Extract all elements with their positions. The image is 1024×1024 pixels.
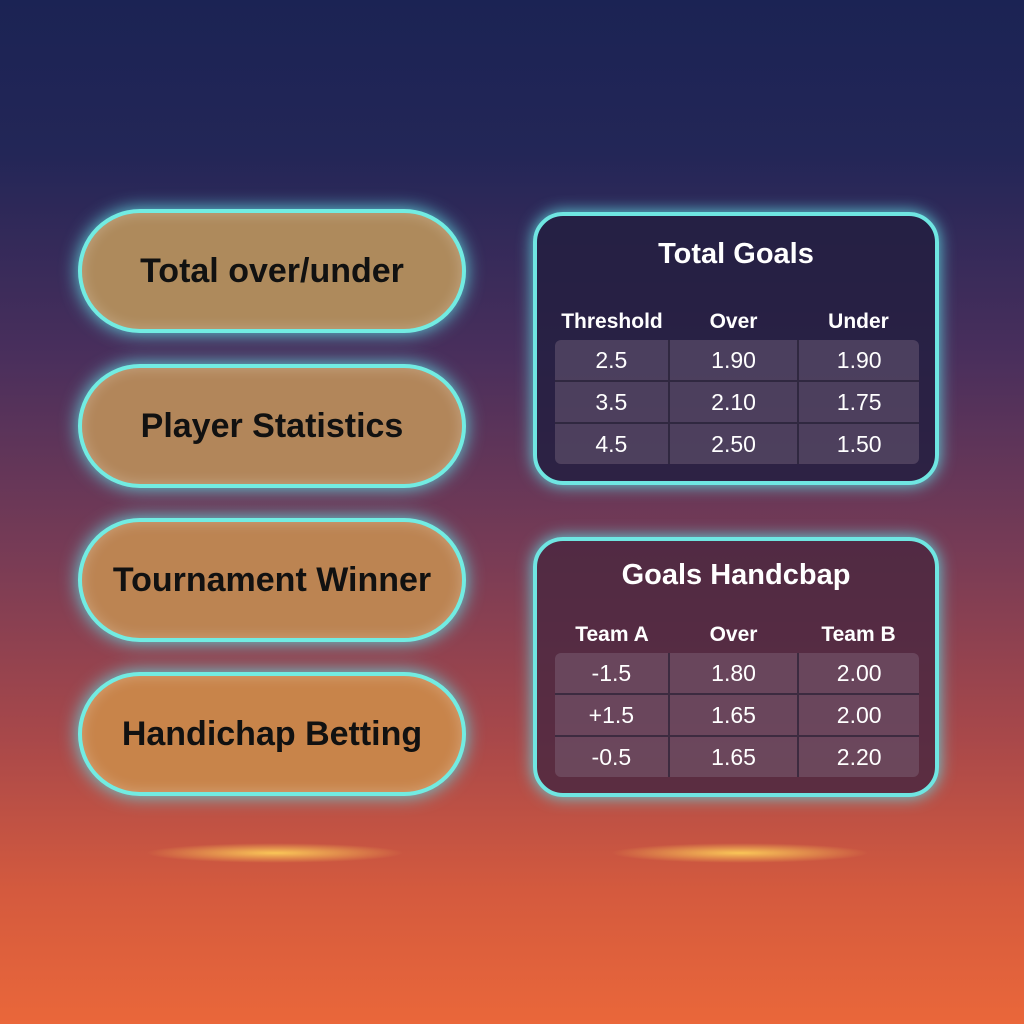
table: +1.5 — [589, 702, 634, 728]
table header: Team B — [821, 623, 896, 646]
table: 1.50 — [837, 431, 882, 457]
table: 2.10 — [711, 389, 756, 415]
table: 1.75 — [837, 389, 882, 415]
table header — [575, 623, 896, 646]
table: 1.80 — [711, 660, 756, 686]
table: -0.5 — [592, 744, 631, 770]
table — [555, 340, 919, 464]
heading: Goals Handcbap — [622, 559, 850, 591]
table: 1.65 — [711, 744, 756, 770]
table: 4.5 — [595, 431, 627, 457]
pill: Tournament Winner — [78, 518, 466, 642]
table: 2.50 — [711, 431, 756, 457]
table: 1.90 — [711, 347, 756, 373]
table: 2.20 — [837, 744, 882, 770]
table header — [561, 310, 889, 333]
pill: Handichap Betting — [78, 672, 466, 796]
table header: Over — [710, 310, 757, 333]
pill: Total over/under — [78, 209, 466, 333]
table: -1.5 — [592, 660, 631, 686]
glow left — [145, 843, 405, 863]
table header: Over — [710, 623, 757, 646]
pill: Handichap Betting: Handichap Betting — [122, 714, 422, 752]
heading: Total Goals — [658, 238, 814, 270]
pill: Player Statistics: Player Statistics — [141, 406, 403, 444]
pill: Player Statistics — [78, 364, 466, 488]
table — [555, 653, 919, 777]
pill: Total over/under: Total over/under — [140, 252, 404, 290]
table: 2.5 — [595, 347, 627, 373]
table: 2.00 — [837, 702, 882, 728]
table header: Threshold — [561, 310, 663, 333]
panel: Goals Handcbap — [533, 537, 939, 797]
table: 1.90 — [837, 347, 882, 373]
glow right — [610, 843, 870, 863]
table: 3.5 — [595, 389, 627, 415]
table header: Under — [828, 310, 889, 333]
pill: Tournament Winner: Tournament Winner — [113, 560, 431, 598]
table: 1.65 — [711, 702, 756, 728]
table header: Team A — [575, 623, 649, 646]
panel: Total Goals — [533, 212, 939, 485]
table: 2.00 — [837, 660, 882, 686]
